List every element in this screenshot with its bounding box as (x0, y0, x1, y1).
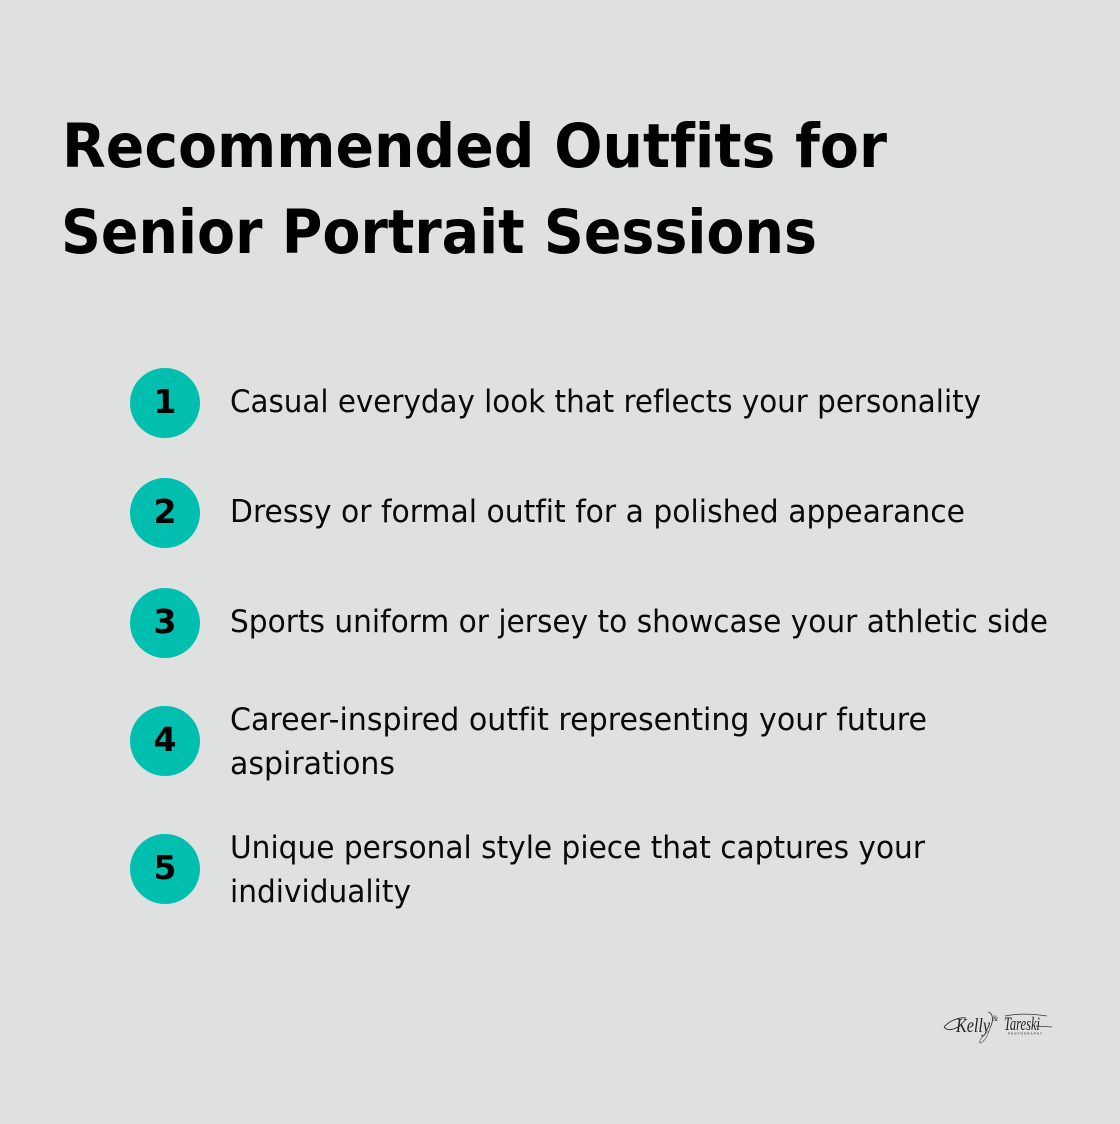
number badge 1: 1 (154, 382, 176, 421)
logo: photographer signature: Tareski (1004, 1014, 1040, 1035)
item 3 text: Sports uniform or jersey to showcase your athletic side (230, 604, 1048, 640)
title: Recommended Outfits for (62, 111, 887, 182)
logo: photographer signature: PHOTOGRAPHY (1008, 1032, 1042, 1036)
list item 1 (130, 368, 981, 438)
number badge 4: 4 (154, 720, 176, 759)
item 5 text: individuality (230, 874, 411, 910)
list item 3 (130, 588, 1048, 658)
number badge 3 (130, 588, 200, 658)
number badge 5 (130, 834, 200, 904)
number badge 2 (130, 478, 200, 548)
number badge 4 (130, 706, 200, 776)
logo: photographer signature: & (992, 1014, 999, 1023)
number badge 2: 2 (154, 492, 176, 531)
item 1 text: Casual everyday look that reflects your personality (230, 384, 981, 420)
list item 2 (130, 478, 965, 548)
item 4 text: aspirations (230, 746, 395, 782)
number badge 1 (130, 368, 200, 438)
item 5 text (230, 830, 925, 910)
item 2 text: Dressy or formal outfit for a polished appearance (230, 494, 965, 530)
list item 5 (130, 830, 925, 910)
list item 4 (130, 702, 927, 782)
title: Senior Portrait Sessions (61, 197, 817, 268)
number badge 3: 3 (154, 602, 176, 641)
item 4 text: Career-inspired outfit representing your future (230, 702, 927, 738)
logo: photographer signature (944, 1012, 1052, 1043)
item 5 text: Unique personal style piece that captures your (230, 830, 925, 866)
number badge 5: 5 (154, 848, 176, 887)
title (61, 111, 887, 268)
item 4 text (230, 702, 927, 782)
logo: photographer signature: Kelly (955, 1015, 990, 1037)
